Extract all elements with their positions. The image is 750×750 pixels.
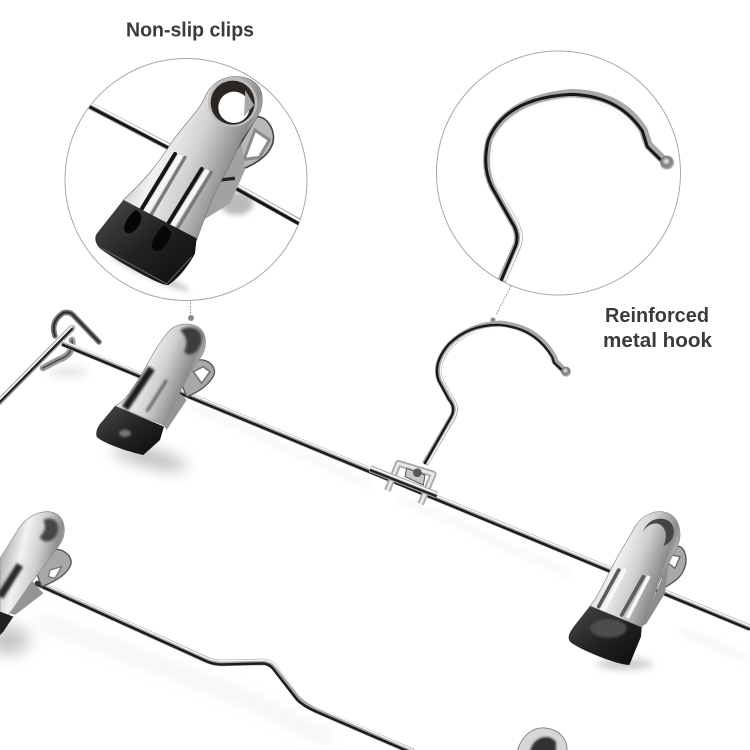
clip: right — [569, 512, 686, 665]
back clip plate — [237, 117, 273, 169]
clip eyelet — [208, 78, 257, 127]
clip shadow — [220, 192, 253, 215]
heading: reinforced metal hook — [603, 305, 713, 352]
clip body — [123, 76, 262, 240]
rubber tip — [95, 200, 197, 285]
hook on hanger — [370, 324, 571, 504]
heading: reinforced metal hook: metal hook — [603, 330, 713, 352]
heading: non-slip clips: Non-slip clips — [126, 20, 254, 42]
lower bar — [37, 581, 413, 750]
hook detail — [486, 93, 674, 281]
wire: detail — [89, 103, 300, 224]
hanger back wire and corner hook — [0, 312, 99, 404]
clip: bottom edge — [517, 728, 567, 750]
panel: hook detail circle — [436, 51, 680, 295]
clip: lower left — [0, 512, 71, 635]
clip: upper left — [96, 324, 214, 455]
hook clamp — [387, 463, 433, 504]
callout connector: clip — [188, 300, 194, 321]
panel: clip detail circle — [65, 58, 307, 300]
main clamp bar — [62, 341, 750, 630]
clip grooves — [140, 154, 211, 228]
callout connector: hook — [490, 286, 511, 322]
heading: reinforced metal hook: Reinforced — [605, 305, 709, 327]
soft floor shadows — [0, 367, 750, 740]
